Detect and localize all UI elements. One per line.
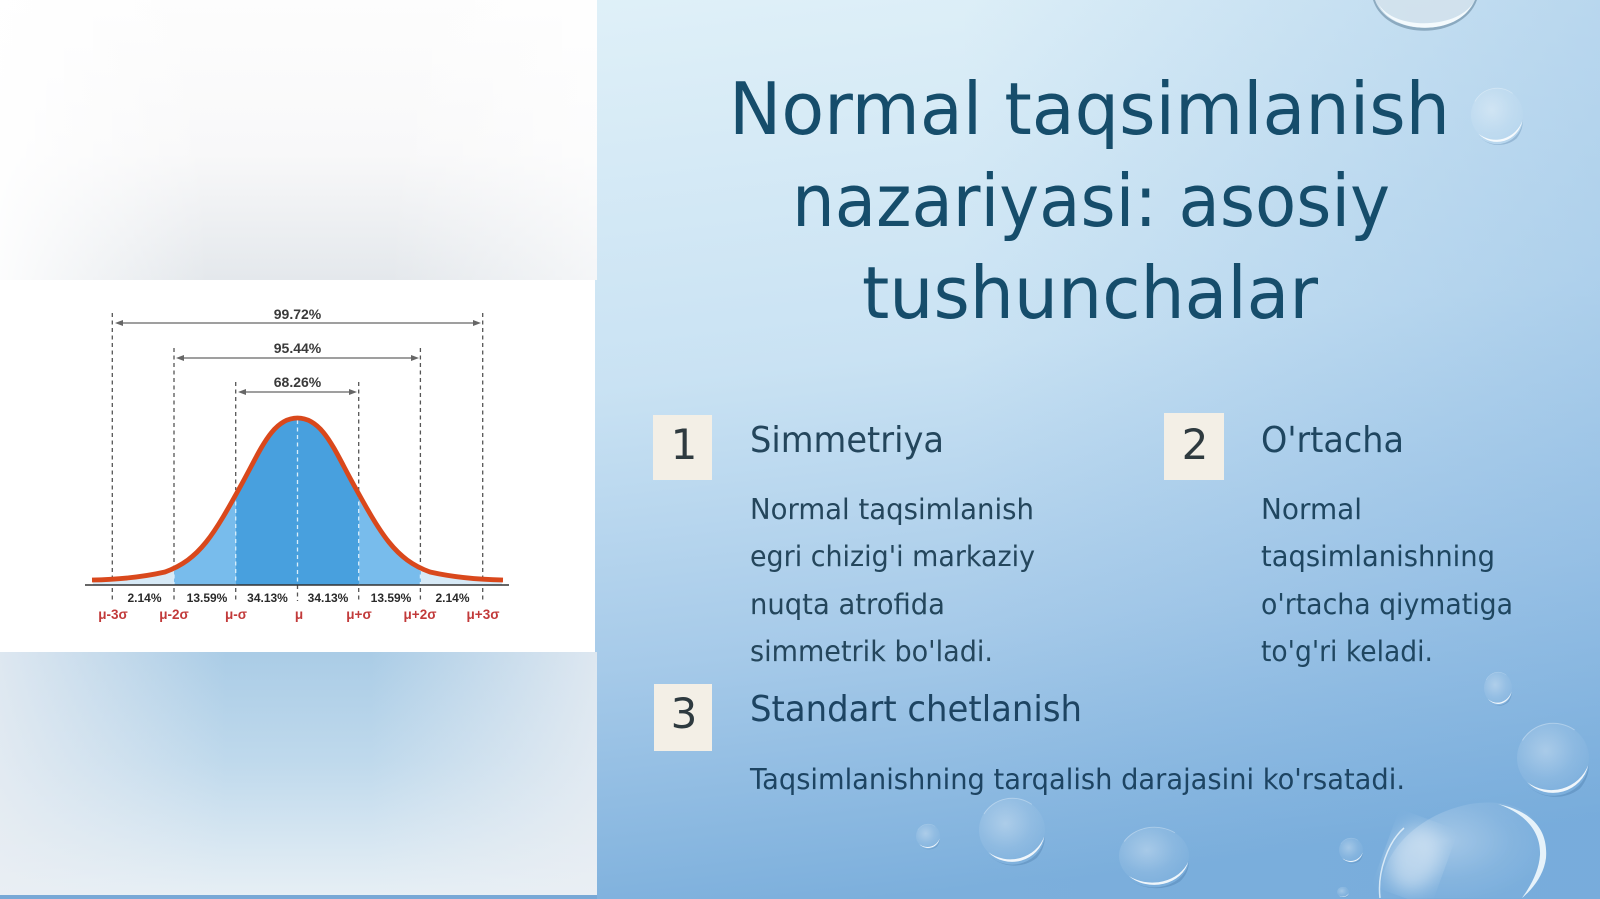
percentage labels: 13.59% <box>371 591 412 605</box>
percentage labels: 34.13% <box>308 591 349 605</box>
number badge 3 <box>654 684 712 751</box>
sigma labels: μ-3σ <box>98 607 128 622</box>
body 1 <box>750 493 1035 668</box>
sigma labels <box>98 607 499 622</box>
heading 1: Simmetriya <box>750 420 944 461</box>
range labels <box>274 306 322 390</box>
body 1: nuqta atrofida <box>750 588 945 621</box>
percentage labels: 34.13% <box>247 591 288 605</box>
heading 2: O'rtacha <box>1261 420 1404 461</box>
range labels: 95.44% <box>274 340 322 356</box>
body 1: simmetrik bo'ladi. <box>750 635 993 668</box>
range labels: 68.26% <box>274 374 322 390</box>
big drop cut by bottom edge <box>1379 803 1546 899</box>
percentage labels: 2.14% <box>435 591 470 605</box>
number badge 1: 1 <box>671 420 697 469</box>
body 1: egri chizig'i markaziy <box>750 540 1035 573</box>
sigma labels: μ+2σ <box>404 607 436 622</box>
range labels: 99.72% <box>274 306 322 322</box>
body 2: to'g'ri keladi. <box>1261 635 1433 668</box>
title <box>729 67 1450 335</box>
item 3: Standart chetlanish <box>654 684 1405 796</box>
sigma labels: μ+σ <box>346 607 372 622</box>
percentage labels <box>127 591 470 605</box>
sigma labels: μ-2σ <box>159 607 189 622</box>
heading 3: Standart chetlanish <box>750 689 1082 730</box>
body 2 <box>1261 493 1513 668</box>
item 1: Simmetriya <box>653 415 1035 668</box>
chart: normal distribution bell curve <box>0 280 595 652</box>
title: nazariyasi: asosiy <box>792 159 1390 243</box>
sigma labels: μ <box>295 607 303 622</box>
sigma labels: μ-σ <box>225 607 247 622</box>
body 1: Normal taqsimlanish <box>750 493 1034 526</box>
number badge 2 <box>1164 413 1224 480</box>
range arrows <box>115 320 481 395</box>
number badge 1 <box>653 415 712 480</box>
chart area fills <box>92 410 502 586</box>
axis <box>85 584 509 586</box>
curve <box>92 418 503 580</box>
body 3: Taqsimlanishning tarqalish darajasini ko'rsatadi. <box>749 763 1405 796</box>
sigma labels: μ+3σ <box>467 607 499 622</box>
gridlines dashed <box>112 313 483 601</box>
title: tushunchalar <box>862 251 1318 335</box>
body 2: Normal <box>1261 493 1362 526</box>
number badge 2: 2 <box>1182 420 1208 469</box>
water drops decoration <box>916 0 1589 899</box>
percentage labels: 13.59% <box>187 591 228 605</box>
title: Normal taqsimlanish <box>729 67 1450 151</box>
item 2: O'rtacha <box>1164 413 1513 668</box>
percentage labels: 2.14% <box>127 591 162 605</box>
body 2: o'rtacha qiymatiga <box>1261 588 1513 621</box>
panel: left image column <box>0 0 597 899</box>
number badge 3: 3 <box>671 689 697 738</box>
body 2: taqsimlanishning <box>1261 540 1495 573</box>
